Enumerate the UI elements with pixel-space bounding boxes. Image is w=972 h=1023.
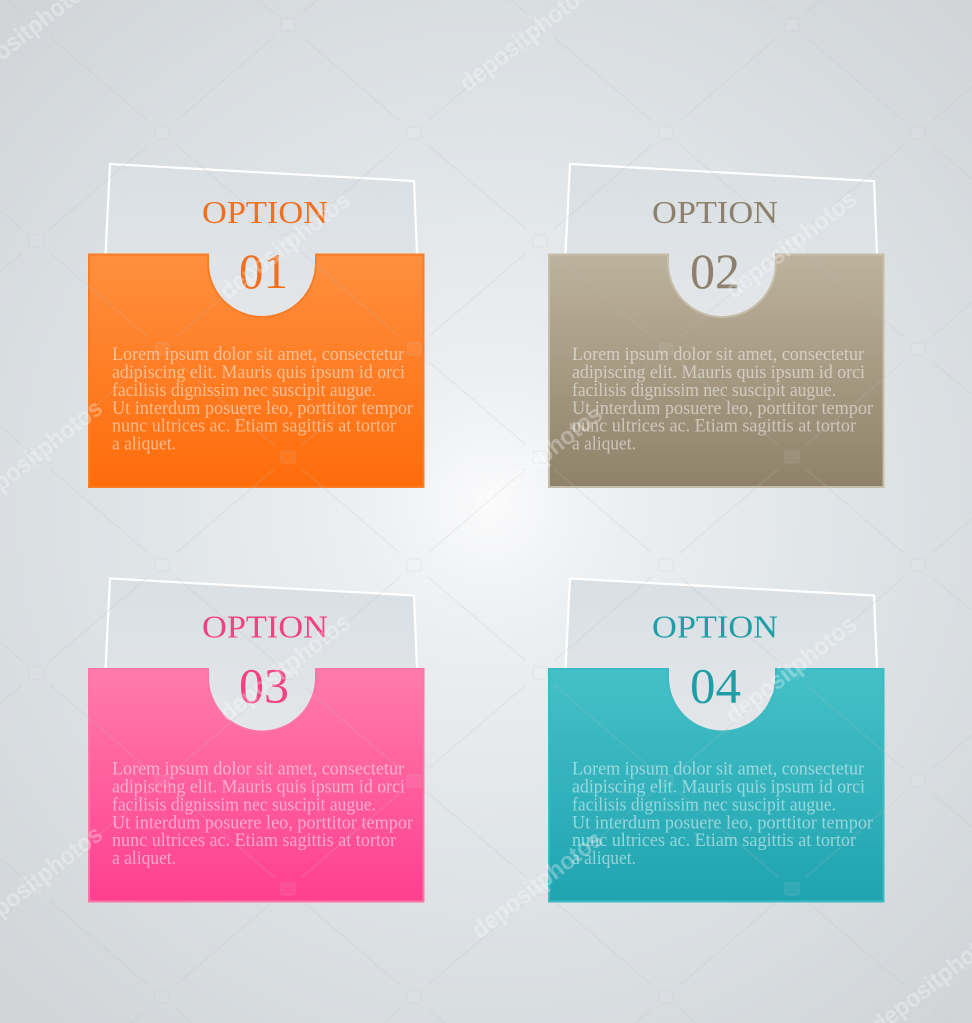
paper card 03 [104,578,418,744]
panel: option 03 [89,578,424,902]
body text 04: Lorem ipsum dolor sit amet, consectetur [572,760,864,780]
body text 02: a aliquet. [572,434,636,454]
body text 03 [112,760,413,869]
body text 01: nunc ultrices ac. Etiam sagittis at tortor [112,416,396,436]
watermark text: depositphotos [214,608,356,727]
body text 04: adipiscing elit. Mauris quis ipsum id orci [572,778,865,798]
body text 02 [572,345,873,454]
watermark text: depositphotos [466,400,608,519]
number 01: 01 [239,243,288,299]
body text 03: Ut interdum posuere leo, porttitor tempor [112,814,413,834]
watermark text: depositphotos [720,610,862,729]
body text 02: facilisis dignissim nec suscipit augue. [572,381,836,401]
body text 02: adipiscing elit. Mauris quis ipsum id orci [572,363,865,383]
body text 03: nunc ultrices ac. Etiam sagittis at tortor [112,831,396,851]
number 02: 02 [690,243,740,299]
panel: option 04 [549,578,884,902]
number 03: 03 [239,658,289,714]
number 04: 04 [690,658,741,714]
body text 01: adipiscing elit. Mauris quis ipsum id orci [112,363,405,383]
paper card 02 [564,164,878,330]
paper card 01 [104,164,418,330]
body text 02: Ut interdum posuere leo, porttitor tempor [572,399,873,419]
body text 04: a aliquet. [572,849,636,869]
watermark text: depositphotos [720,185,862,304]
body text 04 [572,760,873,869]
pink pocket [89,669,424,902]
paper card 04 [564,578,878,744]
heading: option 04: OPTION [652,608,778,644]
body text 02: nunc ultrices ac. Etiam sagittis at tortor [572,416,856,436]
panel: option 02 [549,164,884,487]
watermark text: depositphotos [466,825,608,944]
taupe pocket [549,254,884,487]
body text 01 [112,345,413,454]
body text 01: Lorem ipsum dolor sit amet, consectetur [112,345,404,365]
teal pocket [549,669,884,902]
body text 03: a aliquet. [112,849,176,869]
body text 04: nunc ultrices ac. Etiam sagittis at tortor [572,831,856,851]
heading: option 01: OPTION [202,194,328,230]
body text 04: Ut interdum posuere leo, porttitor tempor [572,814,873,834]
body text 01: facilisis dignissim nec suscipit augue. [112,381,376,401]
watermark text: depositphotos [214,186,356,305]
body text 01: Ut interdum posuere leo, porttitor tempor [112,399,413,419]
body text 03: facilisis dignissim nec suscipit augue. [112,796,376,816]
orange pocket [89,254,424,487]
heading: option 03: OPTION [202,608,328,644]
body text 02: Lorem ipsum dolor sit amet, consectetur [572,345,864,365]
heading: option 02: OPTION [652,194,778,230]
body text 01: a aliquet. [112,434,176,454]
panel: option 01 [89,164,424,487]
body text 03: Lorem ipsum dolor sit amet, consectetur [112,760,404,780]
body text 04: facilisis dignissim nec suscipit augue. [572,796,836,816]
body text 03: adipiscing elit. Mauris quis ipsum id orci [112,778,405,798]
